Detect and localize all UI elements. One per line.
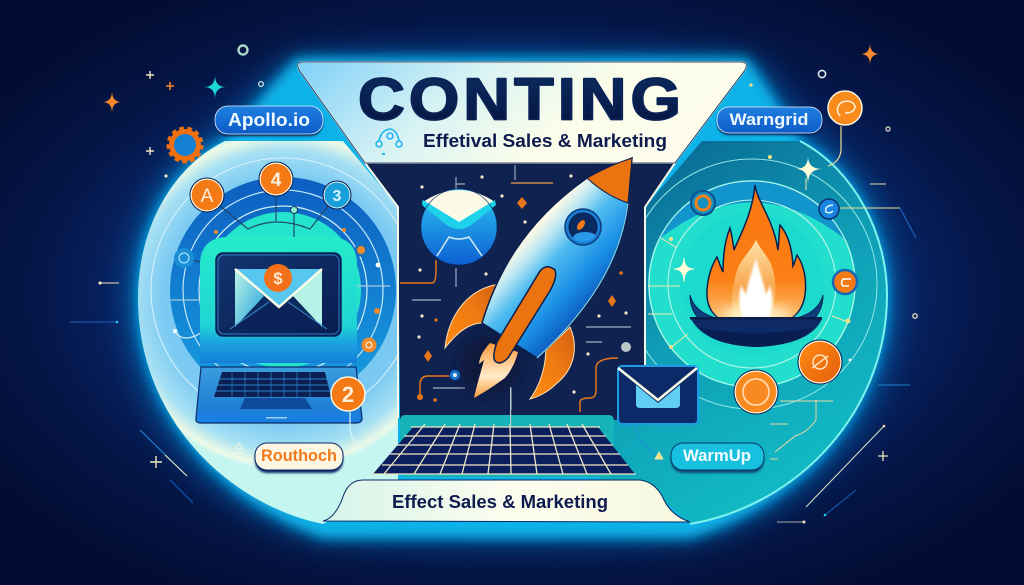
center decorations — [400, 165, 631, 412]
panel: center dark — [365, 163, 675, 420]
node: 4: 4 — [271, 170, 282, 191]
node: 4 — [259, 162, 293, 196]
laptop base — [196, 367, 362, 423]
node: 3: 3 — [333, 188, 342, 205]
nodes on right ring — [691, 191, 857, 414]
icon: flame in bowl — [690, 185, 823, 347]
bottom banner text: Effect Sales & Marketing — [392, 491, 608, 512]
laptop lid — [200, 237, 357, 363]
panel: bottom banner — [323, 480, 690, 522]
pill: WarmUp — [671, 443, 764, 473]
panel: left apollo — [138, 141, 415, 524]
pill: Apollo.io: Apollo.io — [228, 110, 310, 130]
pill: WarmUp: WarmUp — [683, 447, 751, 465]
node: 2 — [331, 377, 365, 411]
flame outer — [707, 185, 806, 319]
icon: laptop — [196, 237, 362, 423]
radar rings right — [627, 155, 877, 459]
panel: right warmup — [600, 141, 887, 524]
rocket window — [565, 209, 601, 245]
pill: Routhoch: Routhoch — [261, 447, 337, 465]
bowl — [691, 319, 822, 347]
icon: round mail badge — [421, 189, 497, 265]
icon: dollar coin: $ — [273, 269, 283, 288]
node: 3 — [323, 181, 351, 209]
pill: Routhoch — [255, 443, 343, 473]
icon: small envelope — [618, 366, 698, 424]
panel: title banner — [298, 62, 746, 163]
title text: CONTING — [358, 67, 685, 133]
rocket exhaust glow — [460, 335, 520, 395]
icon: network cloud — [376, 129, 402, 154]
node: A: A — [201, 186, 214, 207]
pill: Warngrid — [717, 107, 822, 135]
bowl wings — [690, 295, 823, 320]
rocket body — [482, 158, 632, 358]
subtitle text: Effetival Sales & Marketing — [423, 130, 667, 151]
icon: rocket — [445, 158, 632, 399]
decorative sparkles and connectors — [70, 43, 917, 524]
rocket center fin — [494, 267, 556, 363]
laptop screen with envelope — [216, 253, 341, 336]
pill: Warngrid: Warngrid — [730, 110, 808, 129]
rocket right fin — [530, 327, 574, 399]
flame middle — [732, 240, 776, 319]
sparkles right panel — [674, 156, 822, 282]
small left nodes — [174, 244, 376, 352]
rocket exhaust — [474, 343, 518, 398]
pill: Apollo.io — [215, 106, 323, 136]
rocket nose — [587, 158, 632, 203]
flame core — [739, 258, 772, 319]
outer glow — [138, 58, 887, 538]
keyboard grid platform — [372, 387, 636, 477]
rocket left fin — [445, 285, 505, 348]
icon: chat bubble node — [828, 91, 862, 166]
node: 2: 2 — [342, 382, 354, 407]
radar rings left — [150, 158, 397, 394]
node: A — [190, 178, 224, 212]
icon: gear — [168, 128, 202, 162]
